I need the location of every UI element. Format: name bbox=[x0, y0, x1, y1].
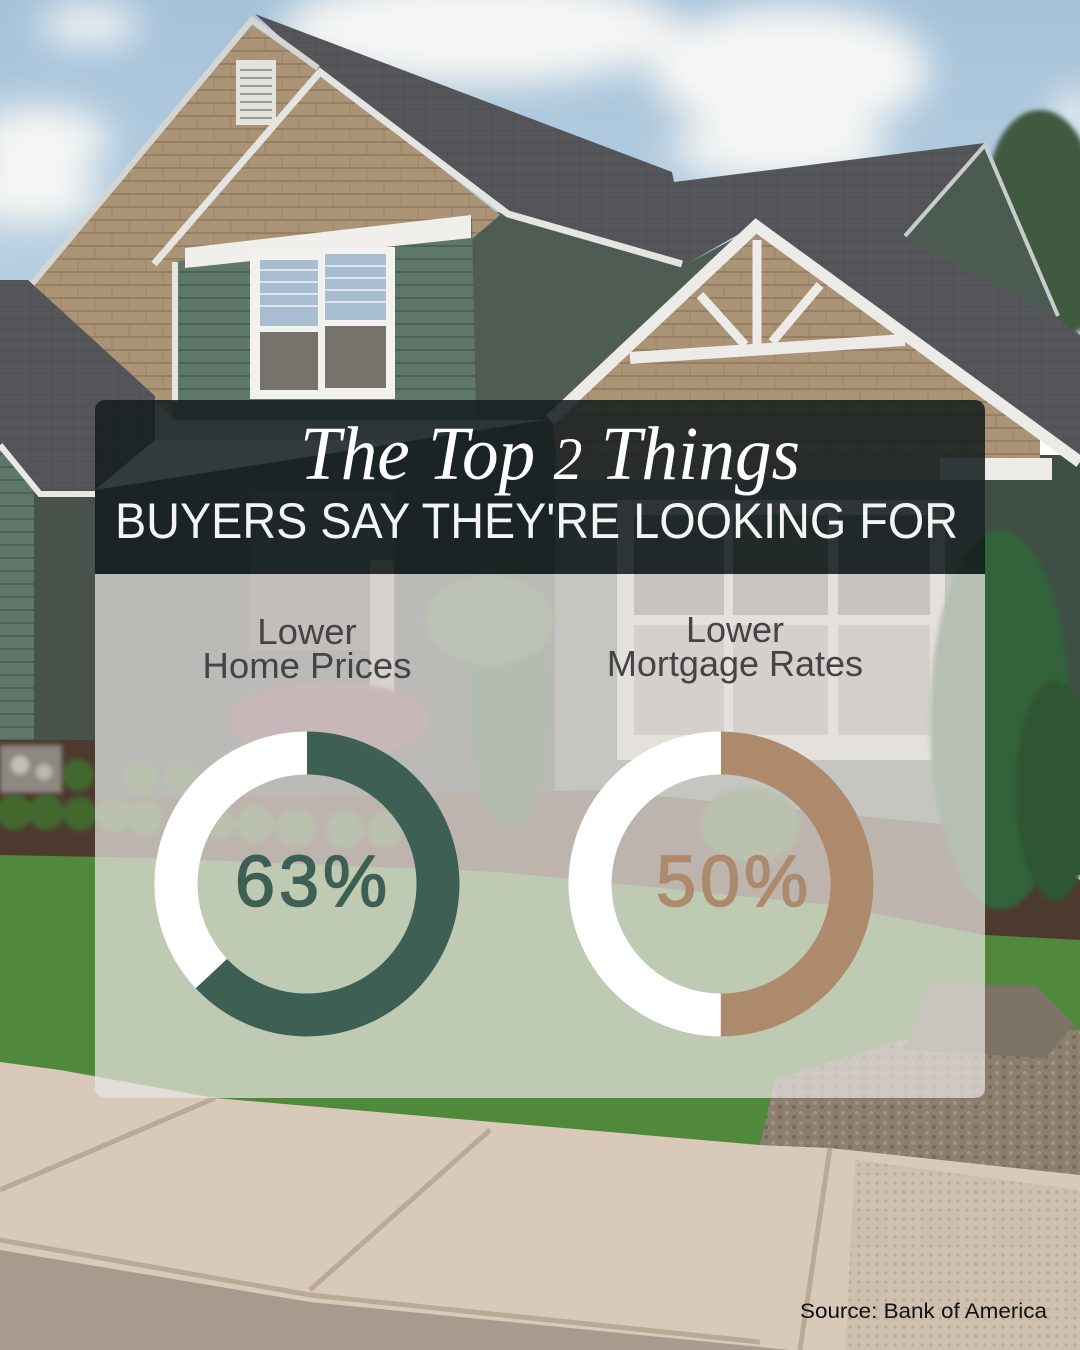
stat: lower mortgage rates bbox=[590, 609, 863, 1015]
entry columns and siding bbox=[250, 490, 625, 820]
main gable trim bbox=[32, 20, 318, 284]
dark wall under the roof bbox=[470, 205, 760, 420]
left lower roof bbox=[0, 280, 155, 494]
gable trim white bbox=[154, 72, 682, 402]
attic vent bbox=[236, 60, 276, 125]
right wing roof and wall bbox=[642, 143, 1080, 470]
right wall bbox=[985, 455, 1080, 875]
front gable trim and brackets bbox=[550, 226, 1080, 480]
subtitle: BUYERS SAY THEY'RE LOOKING FOR bbox=[115, 493, 958, 549]
front gable shingles bbox=[552, 226, 1040, 480]
source credit: Source: Bank of America bbox=[800, 1300, 1047, 1323]
front right wall siding bbox=[555, 240, 1000, 840]
tree behind house bbox=[988, 110, 1080, 335]
large front window bbox=[617, 500, 945, 760]
label: lower mortgage rates: Lower bbox=[686, 609, 784, 650]
green siding wall bbox=[172, 218, 476, 420]
translucent panel bbox=[95, 400, 985, 1098]
sky with clouds bbox=[0, 0, 1080, 440]
garden bed bbox=[0, 740, 1080, 940]
upper right roof bbox=[255, 14, 692, 268]
gravel bed bbox=[760, 1030, 1080, 1190]
shrubs and plants bbox=[0, 530, 1080, 910]
boulder bbox=[905, 985, 1075, 1058]
sidewalk bbox=[0, 1062, 1080, 1350]
label: lower home prices: Lower bbox=[257, 611, 357, 652]
donut chart 50% bbox=[590, 753, 852, 1015]
lawn bbox=[0, 855, 1080, 1180]
donut chart 63% bbox=[176, 753, 438, 1015]
value 63%: 63% bbox=[235, 842, 387, 922]
panel body bbox=[95, 574, 985, 1098]
stone wall bbox=[0, 745, 62, 793]
panel header band bbox=[95, 400, 985, 574]
label: lower mortgage rates: Mortgage Rates bbox=[607, 643, 863, 684]
stat: lower home prices bbox=[176, 611, 438, 1015]
main gable with shingles bbox=[30, 25, 500, 420]
left wall bbox=[0, 445, 100, 746]
front gable shingles bbox=[160, 78, 470, 262]
upper window bbox=[250, 247, 395, 399]
title: The Top 2 Things: The Top 2 Things bbox=[300, 412, 800, 496]
central house wall bbox=[95, 410, 600, 820]
value 50%: 50% bbox=[656, 842, 808, 922]
label: lower home prices: Home Prices bbox=[203, 645, 411, 686]
